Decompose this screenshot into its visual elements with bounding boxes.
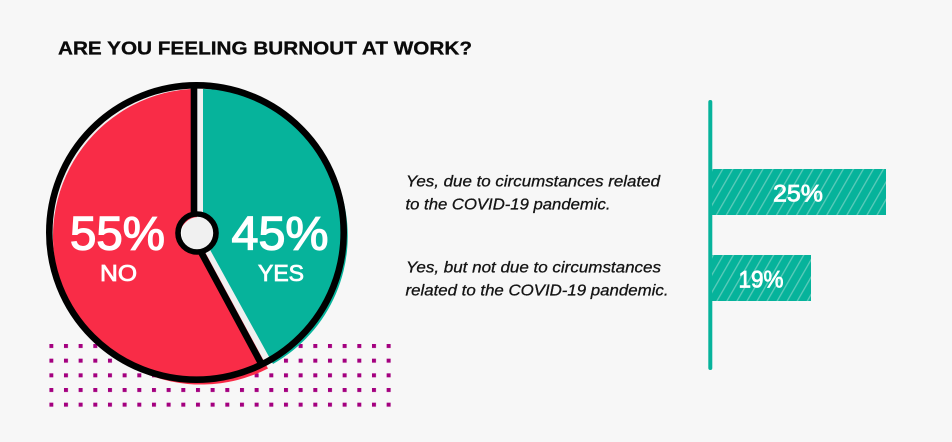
axis [708,100,712,370]
dot pattern [49,344,392,409]
slice: no 55% [53,89,268,385]
label: 45% yes [232,206,328,286]
label: 55% no: 55% [70,206,165,260]
text: covid related: to the COVID-19 pandemic. [406,197,610,214]
text: not covid related: related to the COVID-19 pandemic. [406,283,668,300]
label: 45% yes: YES [258,260,304,286]
pie outline [49,85,344,380]
text: not covid related: Yes, but not due to circumstances [406,259,661,276]
text: covid related [406,174,661,214]
label: 55% no [70,206,165,286]
bar chart [708,100,886,370]
divider: bottom [201,252,262,366]
bar: 25% [712,169,886,215]
text: not covid related [406,259,668,300]
bar: 19% [712,255,811,301]
label: 55% no: NO [100,260,137,286]
bar: 25%: 25% [773,180,823,208]
hub [178,214,216,252]
title: ARE YOU FEELING BURNOUT AT WORK? [58,38,472,58]
label: 45% yes: 45% [232,206,328,260]
pie chart [49,85,348,385]
bar: 19%: 19% [738,266,784,294]
divider: top [191,86,197,214]
text: covid related: Yes, due to circumstances related [406,174,661,191]
slice: yes 45% [203,89,348,364]
